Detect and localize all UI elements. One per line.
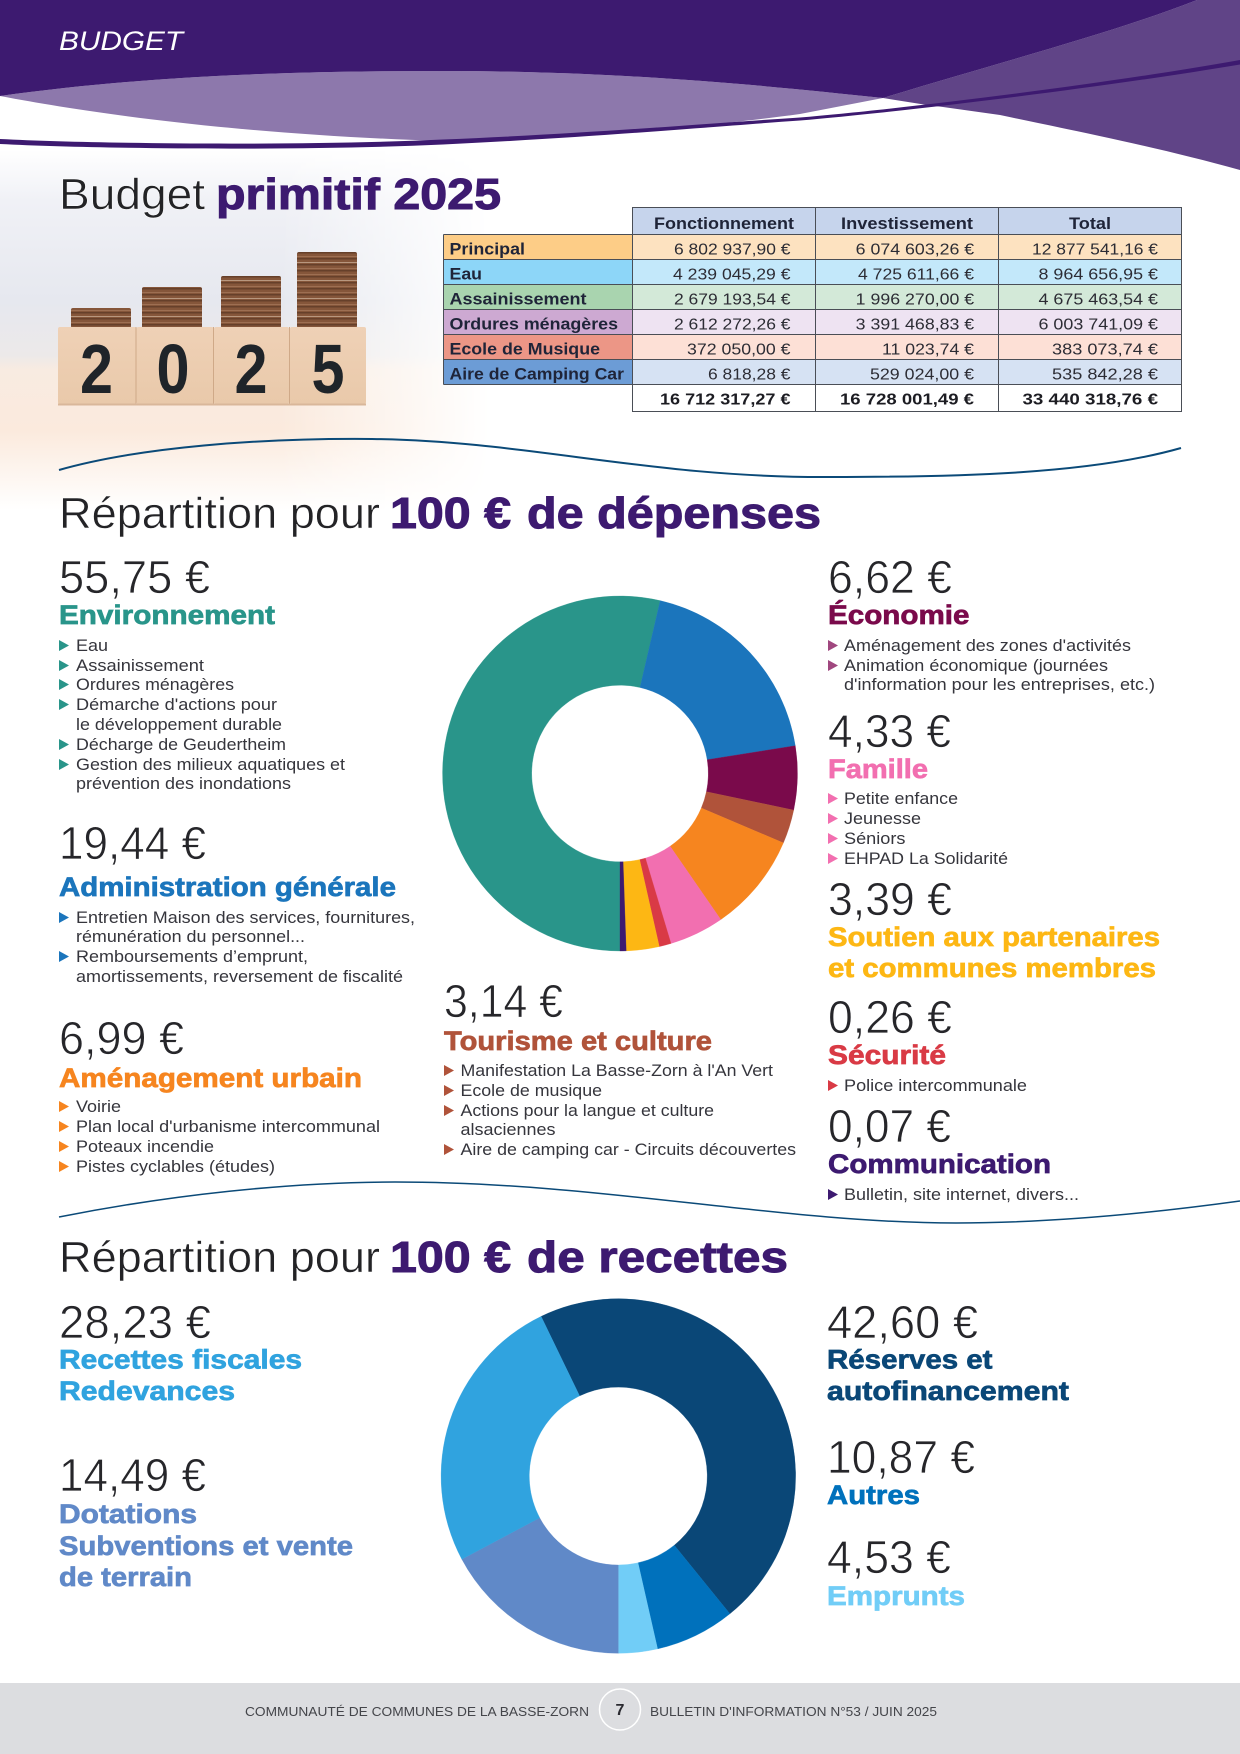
- wooden blocks: 2: [234, 330, 268, 408]
- row: Assainissement: Assainissement: [450, 290, 587, 308]
- heading: recettes: Répartition pour: [59, 1233, 380, 1282]
- block: Administration générale: rémunération du personnel...: [76, 928, 305, 946]
- block: Communication: Bulletin, site internet, divers...: [844, 1186, 1079, 1204]
- table header row: [632, 208, 1182, 234]
- row: Principal: 12 877 541,16 €: [1032, 242, 1158, 258]
- heading: recettes: [59, 1233, 788, 1282]
- heading: dépenses: [59, 489, 821, 538]
- row: Ordures ménagères: [444, 310, 1182, 334]
- block: Aménagement urbain: Aménagement urbain: [59, 1063, 362, 1093]
- block: Administration générale: [59, 817, 415, 986]
- block: Réserves et autofinancement: Réserves et: [827, 1344, 992, 1374]
- block: Famille: Famille: [828, 754, 928, 784]
- block: Aménagement urbain: [59, 1012, 380, 1176]
- row: totals: 16 712 317,27 €: [660, 392, 791, 408]
- row: Principal: 6 802 937,90 €: [674, 242, 791, 258]
- row: Ordures ménagères: 2 612 272,26 €: [674, 316, 791, 334]
- block: Environnement: prévention des inondations: [76, 775, 291, 793]
- block: Sécurité: Sécurité: [828, 1040, 946, 1070]
- block: Économie: d'information pour les entreprises, etc.): [844, 676, 1155, 694]
- header banner: [0, 0, 1240, 170]
- block: Famille: [828, 705, 1008, 868]
- section label: BUDGET: BUDGET: [59, 26, 186, 56]
- block: Tourisme et culture: Ecole de musique: [460, 1082, 602, 1100]
- row: Eau: [444, 260, 1182, 284]
- row: Assainissement: 1 996 270,00 €: [856, 292, 974, 308]
- coin stacks: [71, 252, 357, 329]
- block: Administration générale: Entretien Maison des services, fournitures,: [76, 909, 415, 927]
- block: Recettes fiscales: [59, 1296, 302, 1406]
- block: Emprunts: Emprunts: [827, 1581, 965, 1611]
- block: Environnement: le développement durable: [76, 716, 282, 734]
- budget table: [444, 208, 1182, 412]
- block: Emprunts: 4,53 €: [827, 1531, 951, 1583]
- block: Environnement: Assainissement: [76, 657, 204, 675]
- block: Économie: Économie: [828, 599, 970, 630]
- block: Emprunts: [827, 1531, 965, 1611]
- block: Dotations: de terrain: [59, 1562, 192, 1592]
- block: Famille: Jeunesse: [844, 810, 921, 828]
- wooden blocks: 2: [80, 330, 113, 408]
- row: Ordures ménagères: Ordures ménagères: [450, 316, 618, 334]
- row: totals: [632, 384, 1182, 412]
- page number badge: [600, 1689, 640, 1730]
- block: Environnement: 55,75 €: [59, 551, 210, 603]
- block: Aménagement urbain: 6,99 €: [59, 1012, 184, 1064]
- footer: COMMUNAUTÉ DE COMMUNES DE LA BASSE-ZORN: [245, 1704, 589, 1719]
- block: Administration générale: 19,44 €: [59, 817, 206, 869]
- title: Budget primitif 2025: primitif 2025: [216, 170, 501, 219]
- block: Économie: Animation économique (journées: [844, 657, 1108, 675]
- block: Tourisme et culture: Actions pour la langue et culture: [460, 1102, 714, 1120]
- table header row: Total: [1069, 215, 1111, 233]
- row: totals: 33 440 318,76 €: [1022, 392, 1158, 408]
- block: Communication: [828, 1100, 1079, 1204]
- heading: recettes: de recettes: [527, 1233, 788, 1282]
- row: Assainissement: [444, 284, 1182, 310]
- block: Tourisme et culture: Manifestation La Basse-Zorn à l'An Vert: [460, 1062, 773, 1080]
- row: Eau: 8 964 656,95 €: [1038, 266, 1158, 284]
- block: Sécurité: 0,26 €: [828, 991, 952, 1043]
- footer: BULLETIN D'INFORMATION N°53 / JUIN 2025: [650, 1704, 937, 1719]
- block: Environnement: Démarche d'actions pour: [76, 696, 278, 714]
- block: Recettes fiscales: Recettes fiscales: [59, 1344, 302, 1374]
- block: Communication: 0,07 €: [828, 1100, 951, 1152]
- block: Environnement: Environnement: [59, 600, 275, 630]
- row: Eau: 4 725 611,66 €: [858, 266, 974, 284]
- row: totals: 16 728 001,49 €: [840, 392, 974, 408]
- block: Soutien aux partenaires: [828, 873, 1160, 983]
- block: Communication: Communication: [828, 1149, 1051, 1179]
- block: Dotations: 14,49 €: [59, 1449, 206, 1501]
- row: Aire de Camping Car: 535 842,28 €: [1052, 366, 1158, 384]
- block: Administration générale: Remboursements d’emprunt,: [76, 948, 308, 966]
- row: Aire de Camping Car: [444, 360, 1182, 384]
- block: Environnement: Décharge de Geudertheim: [76, 736, 286, 754]
- block: Famille: 4,33 €: [828, 705, 951, 757]
- donut chart: recettes: [441, 1299, 796, 1653]
- block: Administration générale: amortissements, reversement de fiscalité: [76, 968, 403, 986]
- table header row: Investissement: [841, 215, 974, 233]
- row: Aire de Camping Car: 6 818,28 €: [708, 366, 791, 384]
- wooden blocks: 0: [156, 330, 190, 408]
- block: Aménagement urbain: Poteaux incendie: [76, 1138, 214, 1156]
- block: Tourisme et culture: alsaciennes: [460, 1121, 556, 1139]
- block: Économie: Aménagement des zones d'activités: [844, 637, 1131, 655]
- block: Aménagement urbain: Pistes cyclables (études): [76, 1158, 275, 1176]
- block: Réserves et autofinancement: autofinancement: [827, 1376, 1069, 1406]
- row: Ordures ménagères: 6 003 741,09 €: [1038, 316, 1158, 334]
- block: Tourisme et culture: Aire de camping car - Circuits découvertes: [460, 1141, 796, 1159]
- block: Réserves et autofinancement: [827, 1296, 1069, 1406]
- row: Assainissement: 4 675 463,54 €: [1038, 292, 1158, 308]
- page number badge: 7: [616, 1702, 625, 1719]
- table header row: Fonctionnement: [654, 215, 795, 233]
- block: Environnement: Gestion des milieux aquatiques et: [76, 756, 345, 774]
- block: Famille: Petite enfance: [844, 790, 958, 808]
- heading: dépenses: Répartition pour: [59, 489, 380, 538]
- block: Tourisme et culture: 3,14 €: [444, 975, 563, 1027]
- row: Ecole de Musique: Ecole de Musique: [450, 340, 600, 358]
- block: Aménagement urbain: Voirie: [76, 1098, 121, 1116]
- block: Économie: [828, 551, 1155, 694]
- block: Dotations: Subventions et vente: [59, 1531, 353, 1561]
- row: Principal: [444, 234, 1182, 260]
- block: Autres: Autres: [827, 1480, 920, 1510]
- block: Famille: EHPAD La Solidarité: [844, 850, 1008, 868]
- row: Aire de Camping Car: 529 024,00 €: [870, 366, 974, 384]
- row: Ordures ménagères: 3 391 468,83 €: [856, 316, 974, 334]
- block: Dotations: Dotations: [59, 1499, 197, 1529]
- row: Principal: Principal: [450, 240, 525, 258]
- title: Budget primitif 2025: [59, 170, 501, 219]
- row: Principal: 6 074 603,26 €: [856, 242, 974, 258]
- wooden blocks: [58, 327, 366, 408]
- heading: dépenses: de dépenses: [527, 489, 821, 538]
- heading: recettes: 100 €: [390, 1233, 511, 1282]
- heading: dépenses: 100 €: [390, 489, 511, 538]
- block: Soutien aux partenaires: Soutien aux partenaires: [828, 922, 1160, 952]
- block: Famille: Séniors: [844, 830, 906, 848]
- block: Autres: 10,87 €: [827, 1431, 975, 1483]
- row: Eau: 4 239 045,29 €: [673, 266, 791, 284]
- block: Économie: 6,62 €: [828, 551, 952, 603]
- wooden blocks: 5: [312, 330, 344, 408]
- photo: wooden blocks and coins: [0, 177, 438, 492]
- row: Ecole de Musique: 11 023,74 €: [882, 342, 974, 358]
- block: Sécurité: Police intercommunale: [844, 1077, 1027, 1095]
- row: Assainissement: 2 679 193,54 €: [674, 292, 791, 308]
- block: Recettes fiscales: 28,23 €: [59, 1296, 211, 1348]
- row: Aire de Camping Car: Aire de Camping Car: [450, 366, 625, 384]
- block: Soutien aux partenaires: et communes membres: [828, 953, 1156, 983]
- block: Tourisme et culture: Tourisme et culture: [444, 1026, 712, 1056]
- block: Environnement: Eau: [76, 637, 108, 655]
- block: Aménagement urbain: Plan local d'urbanisme intercommunal: [76, 1118, 380, 1136]
- donut chart: dépenses: [443, 596, 798, 951]
- block: Autres: [827, 1431, 975, 1510]
- row: Ecole de Musique: [444, 334, 1182, 360]
- footer: [0, 1683, 1240, 1754]
- block: Soutien aux partenaires: 3,39 €: [828, 873, 952, 925]
- row: Ecole de Musique: 383 073,74 €: [1052, 342, 1158, 358]
- block: Environnement: [59, 551, 345, 793]
- block: Tourisme et culture: [444, 975, 796, 1159]
- row: Eau: Eau: [450, 266, 482, 284]
- block: Environnement: Ordures ménagères: [76, 676, 234, 694]
- block: Réserves et autofinancement: 42,60 €: [827, 1296, 978, 1348]
- block: Administration générale: Administration générale: [59, 872, 396, 902]
- title: Budget primitif 2025: Budget: [59, 170, 205, 219]
- row: Ecole de Musique: 372 050,00 €: [687, 342, 791, 358]
- block: Recettes fiscales: Redevances: [59, 1376, 235, 1406]
- block: Dotations: [59, 1449, 353, 1592]
- block: Sécurité: [828, 991, 1027, 1095]
